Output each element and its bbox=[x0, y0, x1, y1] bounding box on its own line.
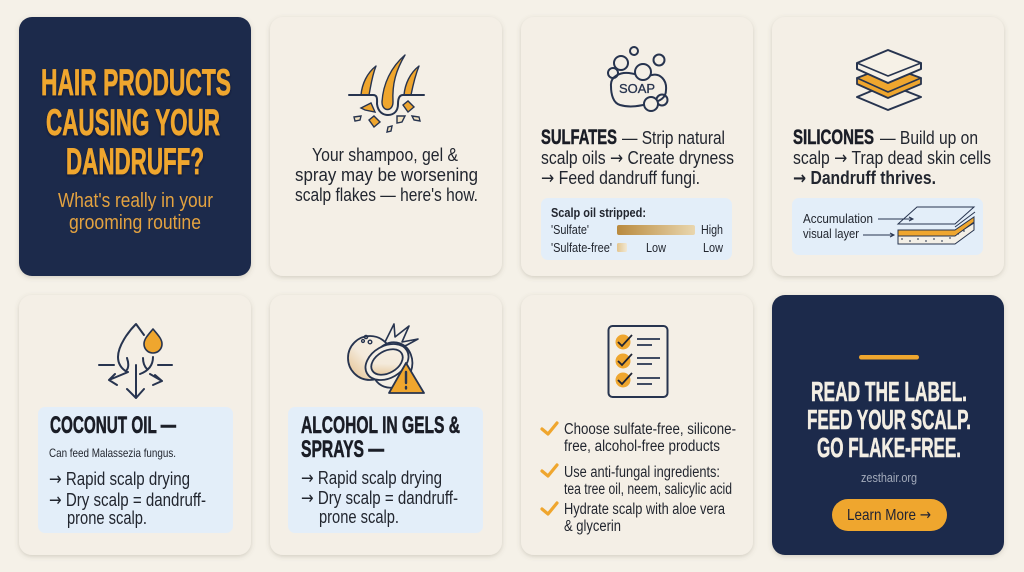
text: silicones description bbox=[793, 126, 991, 189]
heading: main title: DANDRUFF? bbox=[66, 141, 204, 182]
heading: main title: HAIR PRODUCTS bbox=[41, 62, 231, 103]
panel: solutions checklist bbox=[521, 295, 753, 555]
panel: alcohol bbox=[270, 295, 502, 555]
callout: alcohol in gels and sprays: prone scalp. bbox=[319, 507, 399, 527]
callout: alcohol in gels and sprays: → Rapid scalp drying bbox=[301, 468, 442, 489]
callout: coconut oil: → Rapid scalp drying bbox=[49, 469, 190, 490]
list: tip 2 bbox=[542, 464, 732, 498]
text: silicones description: → Dandruff thrives. bbox=[793, 168, 936, 189]
panel: title bbox=[19, 17, 251, 276]
callout: coconut oil: prone scalp. bbox=[67, 508, 147, 528]
diagram: accumulation visual layer: Accumulation bbox=[803, 211, 873, 226]
list: tip 2: Use anti-fungal ingredients: bbox=[564, 464, 720, 481]
chart: scalp oil stripped: Low bbox=[703, 241, 724, 255]
text: sulfates description: SULFATES bbox=[541, 126, 617, 149]
panel: call to action bbox=[772, 295, 1004, 555]
heading: main title: CAUSING YOUR bbox=[46, 102, 220, 143]
subtitle bbox=[58, 190, 213, 234]
chart: scalp oil stripped: 'Sulfate-free' bbox=[551, 241, 612, 255]
list: tip 3: Hydrate scalp with aloe vera bbox=[564, 501, 725, 518]
callout: coconut oil: COCONUT OIL — bbox=[50, 412, 176, 439]
subtitle: What's really in your bbox=[58, 190, 213, 212]
list: tip 1: free, alcohol-free products bbox=[564, 438, 720, 455]
text: silicones description: scalp → Trap dead skin cells bbox=[793, 148, 991, 169]
text: sulfates description: → Feed dandruff fungi. bbox=[541, 168, 700, 189]
panel: intro bbox=[270, 17, 502, 276]
callout: coconut oil bbox=[38, 407, 233, 533]
text: intro message: Your shampoo, gel & bbox=[312, 145, 458, 165]
button: learn more: Learn More → bbox=[847, 505, 931, 524]
text: silicones description: — Build up on bbox=[880, 128, 978, 148]
heading: main title bbox=[41, 62, 231, 182]
icon: soap and bubbles bbox=[608, 47, 668, 111]
accent bar bbox=[859, 355, 919, 360]
text: intro message: scalp flakes — here's how. bbox=[295, 185, 478, 205]
panel: silicones bbox=[772, 17, 1004, 276]
button: learn more bbox=[832, 499, 947, 531]
chart: scalp oil stripped: 'Sulfate' bbox=[551, 223, 589, 237]
icon: soap and bubbles: SOAP bbox=[619, 81, 655, 96]
icon: checklist bbox=[608, 326, 668, 397]
text: sulfates description bbox=[541, 126, 734, 189]
callout: alcohol in gels and sprays: → Dry scalp = dandruff- bbox=[301, 488, 458, 509]
text: sulfates description: scalp oils → Create dryness bbox=[541, 148, 734, 169]
text: intro message bbox=[295, 145, 478, 205]
panel: coconut oil bbox=[19, 295, 251, 555]
list: tip 2: tea tree oil, neem, salicylic acid bbox=[564, 481, 732, 498]
website: zesthair.org bbox=[861, 470, 917, 485]
icon: coconut with warning triangle bbox=[348, 324, 424, 393]
panel: sulfates bbox=[521, 17, 753, 276]
chart: scalp oil stripped: Scalp oil stripped: bbox=[551, 206, 646, 220]
list: tip 3: & glycerin bbox=[564, 518, 621, 535]
chart: scalp oil stripped: Low bbox=[646, 241, 667, 255]
text: sulfates description: — Strip natural bbox=[622, 128, 725, 148]
icon: hair follicles and flakes bbox=[349, 55, 424, 132]
subtitle: grooming routine bbox=[69, 212, 201, 234]
diagram: accumulation visual layer: visual layer bbox=[803, 226, 860, 241]
callout: coconut oil: Can feed Malassezia fungus. bbox=[49, 446, 176, 460]
list: tip 3 bbox=[542, 501, 725, 535]
list: tip 1: Choose sulfate-free, silicone- bbox=[564, 421, 736, 438]
icon: oil drop with arrows bbox=[99, 324, 172, 398]
text: silicones description: SILICONES bbox=[793, 126, 874, 149]
text: intro message: spray may be worsening bbox=[295, 165, 478, 185]
callout: alcohol in gels and sprays: SPRAYS — bbox=[301, 436, 384, 463]
callout: alcohol in gels and sprays: ALCOHOL IN GELS & bbox=[301, 412, 460, 439]
chart: scalp oil stripped: High bbox=[701, 223, 723, 237]
list: tip 1 bbox=[542, 421, 736, 455]
callout: alcohol in gels and sprays bbox=[288, 407, 483, 533]
callout: coconut oil: → Dry scalp = dandruff- bbox=[49, 490, 206, 511]
diagram: accumulation visual layer bbox=[792, 198, 983, 255]
icon: stacked layers bbox=[857, 50, 921, 110]
heading: call to action bbox=[807, 376, 971, 463]
chart: scalp oil stripped bbox=[541, 198, 732, 260]
